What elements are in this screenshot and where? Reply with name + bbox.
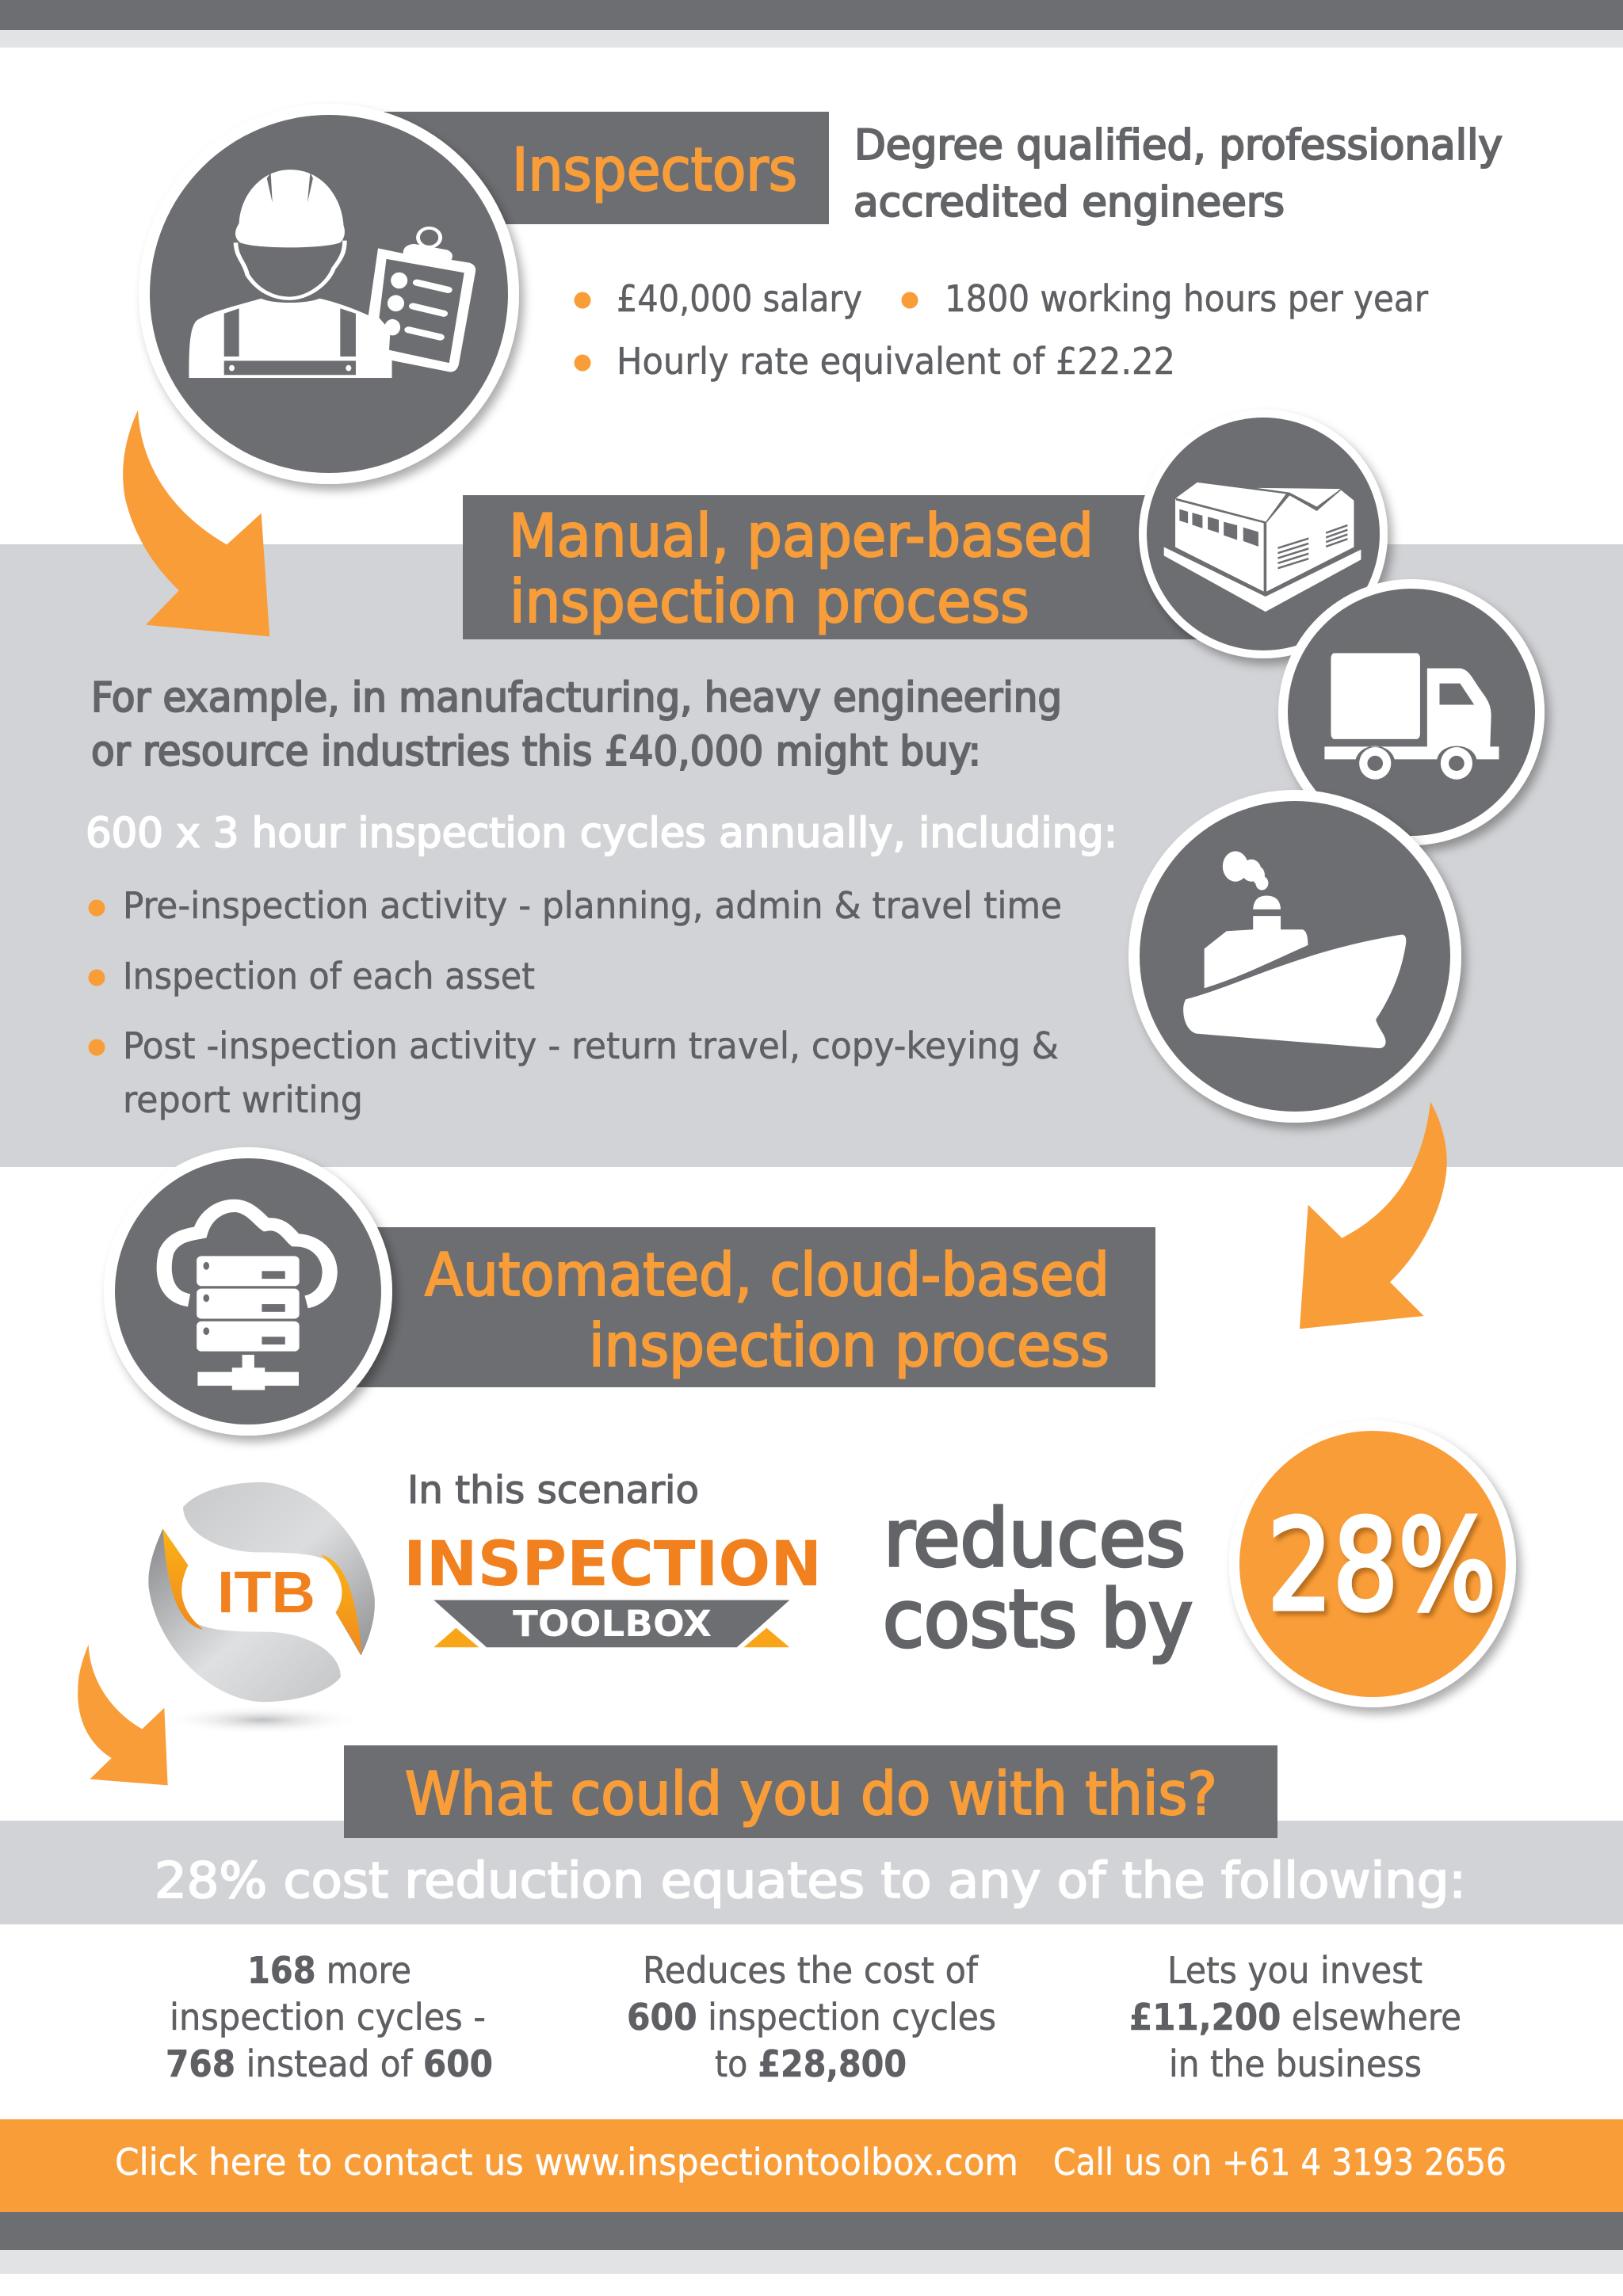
text: degree qualified description: accredited engineers bbox=[854, 178, 1285, 227]
text: degree qualified description bbox=[854, 121, 1503, 227]
text: reduces costs by bbox=[883, 1492, 1193, 1665]
icon: factory in circle bbox=[1139, 410, 1388, 658]
heading banner: automated process: inspection process bbox=[589, 1310, 1109, 1380]
text: example intro: or resource industries this £40,000 might buy: bbox=[91, 728, 981, 776]
arrow: to what could you do bbox=[78, 1645, 168, 1785]
list: inspection activities: Inspection of each asset bbox=[123, 955, 535, 997]
heading banner: automated process bbox=[317, 1227, 1155, 1387]
text: degree qualified description: Degree qualified, professionally bbox=[854, 121, 1503, 170]
icon: inspector in circle bbox=[139, 104, 519, 484]
heading banner: what could you do: What could you do with this? bbox=[405, 1759, 1217, 1829]
list: inspector facts: 1800 working hours per year bbox=[945, 277, 1429, 320]
column: reduced cost: Reduces the cost of bbox=[643, 1949, 979, 1992]
column: more inspection cycles: inspection cycles - bbox=[170, 1996, 486, 2039]
bottom light bar bbox=[0, 2250, 1623, 2274]
column: more inspection cycles bbox=[166, 1949, 493, 2085]
column: invest elsewhere bbox=[1129, 1949, 1461, 2085]
logo: ITB swirl sphere: ITB bbox=[217, 1559, 315, 1625]
list: inspector facts bbox=[574, 277, 1429, 383]
panel: cost reduction grey band: 28% cost reduction equates to any of the following: bbox=[155, 1852, 1466, 1909]
footer: contact band: Click here to contact us www.inspectiontoolbox.com bbox=[115, 2141, 1018, 2183]
column: reduced cost: to £28,800 bbox=[715, 2042, 907, 2085]
list: inspection activities bbox=[89, 884, 1062, 1121]
text: example intro bbox=[91, 674, 1062, 776]
heading banner: what could you do bbox=[344, 1745, 1277, 1838]
top dark bar bbox=[0, 0, 1623, 30]
logo: Inspection Toolbox wordmark: INSPECTION bbox=[403, 1529, 822, 1600]
logo: Inspection Toolbox wordmark: TOOLBOX bbox=[513, 1603, 712, 1645]
list: inspector facts: £40,000 salary bbox=[617, 277, 862, 320]
column: more inspection cycles: 168 more bbox=[247, 1949, 411, 1992]
text: example intro: For example, in manufacturing, heavy engineering bbox=[91, 674, 1062, 722]
heading banner: Inspectors: Inspectors bbox=[512, 135, 797, 204]
icon: ship in circle bbox=[1128, 790, 1461, 1123]
arrow: inspectors to manual bbox=[123, 410, 269, 636]
icon: cloud server in circle bbox=[104, 1147, 392, 1436]
callout: 28% circle bbox=[1229, 1421, 1516, 1707]
callout: 28% circle: 28% bbox=[1267, 1493, 1496, 1639]
column: more inspection cycles: 768 instead of 600 bbox=[166, 2042, 493, 2085]
panel: manual process grey band bbox=[0, 544, 1623, 1167]
top light bar bbox=[0, 30, 1623, 48]
text: 600 inspection cycles: 600 x 3 hour inspection cycles annually, including: bbox=[86, 810, 1117, 857]
heading banner: Inspectors bbox=[317, 112, 829, 224]
column: reduced cost: 600 inspection cycles bbox=[627, 1996, 996, 2039]
heading banner: manual process: inspection process bbox=[510, 566, 1029, 636]
heading banner: manual process: Manual, paper-based bbox=[509, 501, 1094, 570]
column: invest elsewhere: £11,200 elsewhere bbox=[1129, 1996, 1461, 2039]
text: reduces costs by: costs by bbox=[883, 1573, 1193, 1665]
footer: contact band bbox=[0, 2119, 1623, 2212]
list: inspector facts: Hourly rate equivalent of £22.22 bbox=[617, 340, 1175, 383]
list: inspection activities: Pre-inspection activity - planning, admin & travel time bbox=[123, 884, 1062, 927]
column: reduced cost bbox=[627, 1949, 996, 2085]
logo: Inspection Toolbox wordmark bbox=[403, 1529, 822, 1647]
list: inspection activities: report writing bbox=[123, 1078, 363, 1121]
heading banner: manual process bbox=[463, 495, 1197, 639]
bottom dark bar bbox=[0, 2212, 1623, 2250]
panel: cost reduction grey band bbox=[0, 1821, 1623, 1924]
text: in this scenario: In this scenario bbox=[407, 1468, 699, 1512]
text: reduces costs by: reduces bbox=[884, 1492, 1186, 1585]
heading banner: automated process: Automated, cloud-based bbox=[425, 1240, 1109, 1310]
arrow: manual to automated bbox=[1300, 1102, 1447, 1329]
column: invest elsewhere: in the business bbox=[1169, 2042, 1422, 2085]
logo: ITB swirl sphere bbox=[148, 1482, 375, 1734]
list: inspection activities: Post -inspection activity - return travel, copy-keying & bbox=[123, 1024, 1059, 1067]
column: invest elsewhere: Lets you invest bbox=[1167, 1949, 1423, 1992]
icon: truck in circle bbox=[1278, 579, 1545, 845]
footer: contact band: Call us on +61 4 3193 2656 bbox=[1053, 2141, 1507, 2183]
